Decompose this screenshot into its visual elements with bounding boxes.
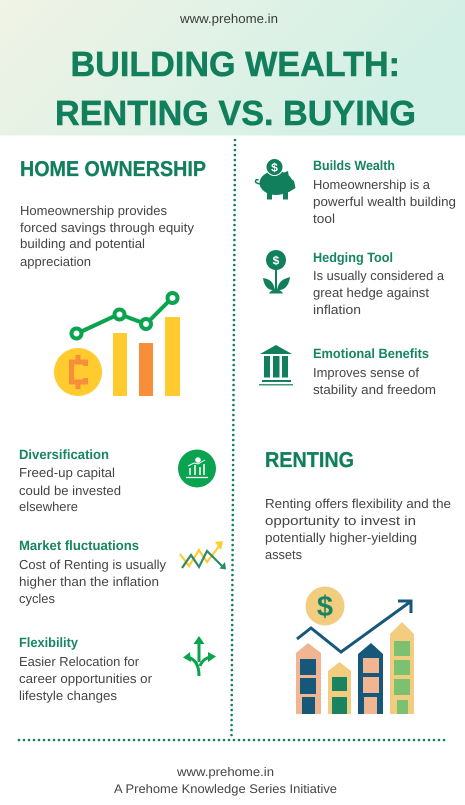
- text: market fluctuations: Cost of Renting is usually: [19, 557, 166, 572]
- footer: www.prehome.in: [176, 765, 274, 779]
- icon: money plant: $: [273, 254, 280, 268]
- panel: hedging tool: [263, 250, 445, 317]
- text: market fluctuations: cycles: [19, 591, 55, 606]
- header band: [0, 0, 465, 136]
- footer: [114, 765, 337, 796]
- text: renting description: potentially higher-yielding: [265, 530, 417, 545]
- heading: hedging tool: Hedging Tool: [313, 250, 393, 265]
- text: flexibility: Easier Relocation for: [19, 654, 140, 669]
- text: market fluctuations: higher than the inflation: [19, 574, 159, 589]
- icon: three way arrows: [183, 636, 216, 676]
- heading: diversification: Diversification: [19, 447, 109, 462]
- illustration: city buildings with rising arrow: [296, 586, 414, 714]
- text: renting description: Renting offers flexibility and the: [265, 496, 451, 511]
- text: renting description: assets: [265, 547, 302, 562]
- heading: home ownership: HOME OWNERSHIP: [20, 157, 206, 181]
- text: flexibility: [19, 654, 153, 703]
- text: home ownership description: building and potential: [20, 236, 145, 251]
- title: RENTING VS. BUYING: [55, 94, 416, 133]
- heading: builds wealth: Builds Wealth: [313, 158, 395, 173]
- text: builds wealth: tool: [313, 211, 335, 226]
- text: home ownership description: [20, 203, 195, 269]
- text: emotional benefits: Improves sense of: [313, 365, 419, 380]
- panel: emotional benefits: [259, 345, 436, 397]
- text: diversification: [19, 465, 121, 514]
- panel: flexibility: [19, 635, 216, 703]
- text: diversification: could be invested: [19, 483, 121, 498]
- text: renting description: opportunity to invest in: [265, 513, 416, 528]
- icon: money plant: [263, 250, 290, 294]
- heading: emotional benefits: Emotional Benefits: [313, 346, 429, 361]
- heading: renting: RENTING: [265, 448, 354, 472]
- text: hedging tool: [313, 268, 445, 317]
- text: flexibility: career opportunities or: [19, 671, 153, 686]
- text: home ownership description: appreciation: [20, 254, 91, 269]
- text: flexibility: lifestyle changes: [19, 688, 117, 703]
- text: renting description: [265, 496, 451, 562]
- title: BUILDING WEALTH:: [70, 45, 400, 84]
- illustration: city buildings with rising arrow: $: [317, 591, 333, 623]
- panel: renting: [265, 448, 451, 562]
- heading: market fluctuations: Market fluctuations: [19, 538, 139, 553]
- text: hedging tool: inflation: [313, 302, 361, 317]
- panel: diversification: [19, 447, 216, 514]
- text: emotional benefits: [313, 365, 436, 397]
- title: [55, 45, 416, 133]
- text: diversification: elsewhere: [19, 499, 78, 514]
- heading: flexibility: Flexibility: [19, 635, 78, 650]
- text: market fluctuations: [19, 557, 166, 606]
- icon: zigzag arrows: [180, 541, 226, 570]
- website url: www.prehome.in: [179, 11, 278, 26]
- vertical dotted divider: [232, 140, 235, 738]
- horizontal dotted divider: [19, 739, 448, 741]
- text: emotional benefits: stability and freedom: [313, 382, 436, 397]
- chart icon: coin, bars and trend line: [54, 293, 180, 396]
- footer: A Prehome Knowledge Series Initiative: [114, 782, 337, 796]
- icon: piggy bank: $: [271, 160, 278, 174]
- panel: builds wealth: [255, 158, 456, 226]
- text: diversification: Freed-up capital: [19, 465, 115, 480]
- panel: market fluctuations: [19, 538, 226, 606]
- text: home ownership description: forced savings through equity: [20, 220, 195, 235]
- panel: home ownership: [20, 157, 206, 269]
- text: builds wealth: Homeownership is a: [313, 177, 431, 192]
- text: builds wealth: powerful wealth building: [313, 194, 456, 209]
- icon: piggy bank: [255, 158, 296, 200]
- text: hedging tool: great hedge against: [313, 285, 429, 300]
- icon: classical building: [259, 345, 293, 386]
- icon: growth badge: [178, 450, 216, 488]
- text: home ownership description: Homeownership provides: [20, 203, 167, 218]
- text: builds wealth: [313, 177, 456, 226]
- text: hedging tool: Is usually considered a: [313, 268, 445, 283]
